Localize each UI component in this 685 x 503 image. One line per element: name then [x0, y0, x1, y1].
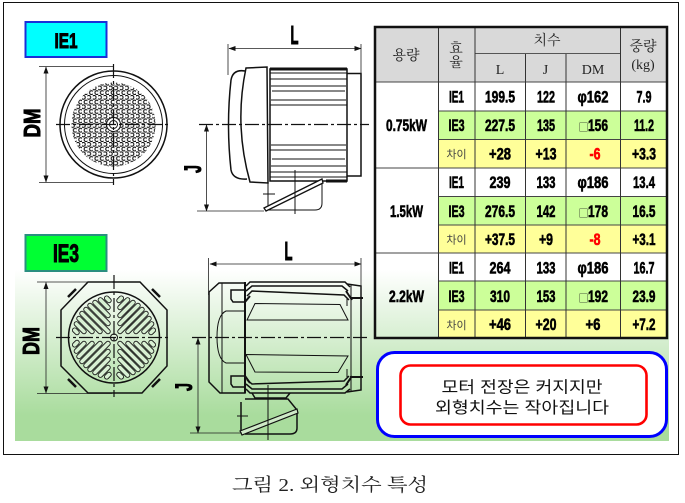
- label: IE1: [26, 22, 106, 57]
- dimension letter DM: DM: [19, 108, 45, 138]
- table background fills: [375, 27, 667, 338]
- table rows: 2.2kW: +46: [489, 315, 511, 334]
- table rows: 0.75kW: 11.2: [634, 116, 654, 135]
- table rows: 2.2kW: IE3: [448, 287, 464, 306]
- table rows: 0.75kW: □: [578, 119, 588, 134]
- table header: 용량: [392, 47, 420, 64]
- dimension letter J: J: [180, 165, 207, 173]
- table rows: 0.75kW: 199.5: [485, 88, 515, 106]
- table rows: 0.75kW: -6: [590, 144, 600, 164]
- table rows: 2.2kW: 153: [536, 287, 556, 306]
- table header: 치수: [533, 32, 561, 49]
- table rows: 1.5kW: +3.1: [632, 230, 656, 249]
- callout: [378, 352, 666, 436]
- drawing: IE1 side view: [180, 20, 369, 214]
- table rows: 0.75kW: +3.3: [632, 144, 656, 164]
- table rows: 0.75kW: IE1: [449, 88, 464, 106]
- table rows: 0.75kW: +28: [489, 144, 511, 164]
- label: IE1: IE1: [54, 30, 78, 53]
- table rows: 1.5kW: 1.5kW: [390, 202, 424, 221]
- table rows: 1.5kW: [390, 173, 656, 249]
- table rows: 0.75kW: 차이: [446, 148, 467, 161]
- table rows: 1.5kW: -8: [590, 230, 600, 249]
- table rows: 2.2kW: 2.2kW: [389, 287, 425, 306]
- table rows: 2.2kW: 23.9: [632, 287, 656, 306]
- table header: 중량: [629, 38, 657, 55]
- table header: 율: [449, 55, 463, 71]
- table header: L: [496, 63, 504, 78]
- table rows: 0.75kW: φ162: [578, 88, 608, 106]
- label: IE3: [26, 235, 106, 271]
- table rows: 1.5kW: +9: [539, 230, 553, 249]
- table rows: 2.2kW: 133: [536, 258, 556, 278]
- table rows: 0.75kW: 7.9: [636, 88, 652, 106]
- table rows: 2.2kW: 차이: [446, 319, 467, 332]
- callout: 외형치수는 작아집니다: [435, 399, 609, 417]
- table header: (kg): [631, 58, 655, 73]
- table rows: 0.75kW: [386, 88, 656, 164]
- table rows: 2.2kW: 16.7: [634, 258, 654, 278]
- table rows: 2.2kW: +6: [586, 315, 600, 334]
- drawing: IE1 front view: [19, 64, 171, 185]
- drawing: IE3 side view: [171, 236, 368, 440]
- table rows: 0.75kW: 122: [537, 88, 555, 106]
- table rows: 1.5kW: 178: [588, 202, 608, 221]
- dimension letter DM: DM: [18, 327, 44, 355]
- table rows: 1.5kW: 133: [536, 173, 556, 192]
- table rows: 1.5kW: 239: [490, 173, 510, 192]
- table rows: 1.5kW: 16.5: [632, 202, 656, 221]
- table: dimensions by capacity: [375, 27, 667, 338]
- table rows: 0.75kW: 227.5: [485, 116, 515, 135]
- table rows: 2.2kW: +20: [536, 315, 556, 334]
- table rows: 1.5kW: 276.5: [485, 202, 515, 221]
- table rows: 1.5kW: IE1: [449, 173, 464, 192]
- table rows: 0.75kW: 135: [537, 116, 555, 135]
- label: IE3: IE3: [53, 240, 79, 268]
- table rows: 2.2kW: 310: [490, 287, 510, 306]
- caption: 그림 2. 외형치수 특성: [232, 474, 428, 495]
- table rows: 1.5kW: 142: [536, 202, 556, 221]
- table rows: 1.5kW: +37.5: [485, 230, 515, 249]
- table rows: 1.5kW: □: [578, 205, 588, 220]
- table rows: 0.75kW: 156: [588, 116, 608, 135]
- table rows: 1.5kW: φ186: [578, 173, 608, 192]
- dimension letter L: L: [290, 20, 299, 50]
- table rows: 2.2kW: +7.2: [632, 315, 656, 334]
- table rows: 0.75kW: IE3: [448, 116, 464, 135]
- green gradient background: [15, 270, 669, 441]
- table header: DM: [582, 63, 605, 78]
- dimension letter L: L: [284, 236, 293, 266]
- callout: 모터 전장은 커지지만: [442, 378, 603, 396]
- table rows: 2.2kW: [389, 258, 656, 334]
- table header: 효: [449, 41, 463, 57]
- table header: J: [543, 63, 549, 78]
- table rows: 2.2kW: □: [578, 290, 588, 305]
- table rows: 1.5kW: 차이: [446, 234, 467, 246]
- table rows: 2.2kW: 192: [588, 287, 608, 306]
- fan slots: [75, 298, 153, 377]
- table rows: 1.5kW: 13.4: [633, 173, 655, 192]
- table rows: 0.75kW: +13: [536, 144, 556, 164]
- table rows: 1.5kW: IE3: [448, 202, 464, 221]
- drawing: IE3 front view: [18, 275, 171, 397]
- table rows: 2.2kW: IE1: [449, 258, 464, 278]
- table rows: 2.2kW: 264: [490, 258, 511, 278]
- table rows: 0.75kW: 0.75kW: [386, 116, 428, 135]
- table header: [392, 32, 657, 78]
- dimension letter J: J: [171, 383, 198, 391]
- table rows: 2.2kW: φ186: [578, 258, 608, 278]
